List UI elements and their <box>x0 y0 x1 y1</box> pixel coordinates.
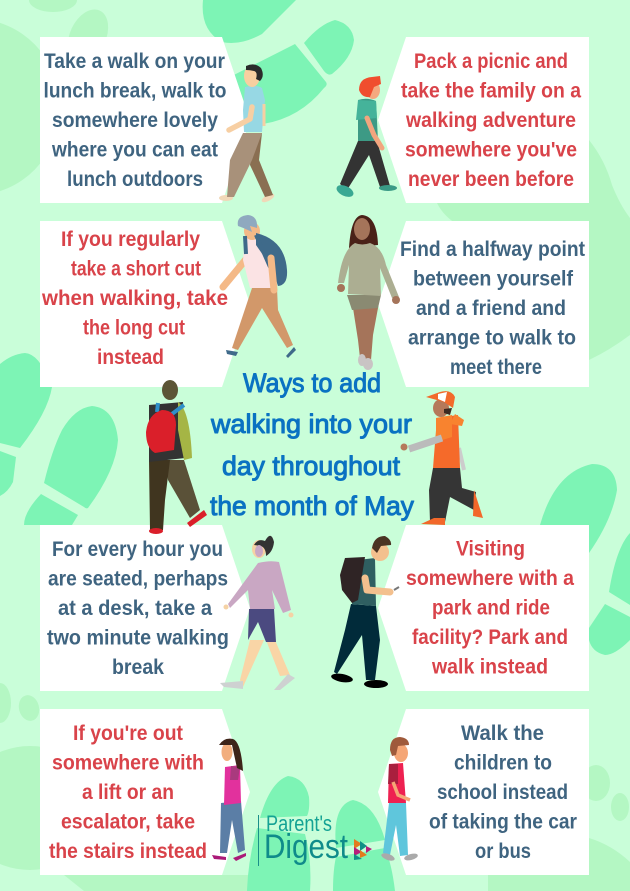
figure: boy in red t-shirt <box>380 737 419 862</box>
title: the month of May <box>210 491 414 521</box>
panel: stairs tip: somewhere with <box>52 752 204 774</box>
panel: picnic tip: take the family on a <box>401 80 581 102</box>
panel: picnic tip: Pack a picnic and <box>414 50 568 73</box>
panel: halfway point tip: between yourself <box>413 268 574 290</box>
title: day throughout <box>222 451 400 481</box>
panel: seated break tip <box>40 525 250 691</box>
panel: halfway point tip: and a friend and <box>416 297 566 320</box>
panel: school run tip: Walk the <box>461 722 544 745</box>
figure: boy in orange hoodie <box>400 391 483 525</box>
title: Ways to add <box>243 368 381 398</box>
panel: halfway point tip: meet there <box>450 356 542 379</box>
panel: halfway point tip <box>378 221 589 387</box>
panel: lunch break tip: lunch outdoors <box>67 168 203 191</box>
panel: park and ride tip: Visiting <box>456 538 525 560</box>
panel: stairs tip: If you're out <box>73 722 183 745</box>
logo: Parent's Digest: Parent's <box>266 811 332 836</box>
panel: seated break tip: are seated, perhaps <box>48 568 228 590</box>
panel: school run tip: school instead <box>437 781 568 804</box>
panel: picnic tip: never been before <box>408 168 574 191</box>
panel: park and ride tip: walk instead <box>431 656 548 678</box>
title <box>210 368 414 521</box>
figure: man in blue t-shirt walking <box>219 64 276 204</box>
panel: park and ride tip: somewhere with a <box>406 567 574 590</box>
panel: long cut tip: take a short cut <box>71 258 201 280</box>
panel: lunch break tip: lunch break, walk to <box>44 80 226 102</box>
figure: woman in green sweater <box>337 215 400 370</box>
panel: seated break tip: at a desk, take a <box>58 597 212 620</box>
panel: seated break tip: For every hour you <box>52 538 223 561</box>
panel: school run tip <box>378 709 589 875</box>
panel: long cut tip: If you regularly <box>61 228 200 251</box>
panel: park and ride tip <box>378 525 589 691</box>
panel: stairs tip <box>40 709 250 875</box>
panel: seated break tip: two minute walking <box>47 626 229 650</box>
panel: picnic tip <box>378 37 589 203</box>
figure: girl in pink top <box>212 739 246 861</box>
panel: long cut tip: instead <box>97 346 164 369</box>
panel: stairs tip: the stairs instead <box>49 840 207 863</box>
panel: school run tip: or bus <box>475 840 531 863</box>
panel: picnic tip: walking adventure <box>405 109 576 132</box>
panel: park and ride tip: facility? Park and <box>412 626 568 649</box>
figure: woman with headphones <box>220 536 295 690</box>
panel: lunch break tip: where you can eat <box>51 138 218 162</box>
panel: halfway point tip: arrange to walk to <box>408 326 576 350</box>
panel: stairs tip: a lift or an <box>82 781 174 804</box>
panel: long cut tip: when walking, take <box>41 287 228 310</box>
figure: man with phone <box>330 536 399 688</box>
panel: school run tip: children to <box>454 752 552 774</box>
figure: red-haired boy walking <box>335 76 397 199</box>
panel: seated break tip: break <box>112 656 164 679</box>
logo: Parent's Digest: Digest <box>264 828 348 866</box>
panel: park and ride tip: park and ride <box>432 596 550 620</box>
panel: halfway point tip: Find a halfway point <box>400 238 585 261</box>
logo: Parent's Digest <box>258 811 372 866</box>
figure: man with red backpack <box>146 380 207 534</box>
figure: man with blue backpack <box>223 215 296 358</box>
panel: school run tip: of taking the car <box>429 810 577 834</box>
panel: lunch break tip <box>40 37 250 203</box>
panel: long cut tip: the long cut <box>83 316 185 340</box>
title: walking into your <box>210 409 412 439</box>
panel: picnic tip: somewhere you've <box>405 138 577 162</box>
panel: stairs tip: escalator, take <box>61 810 195 834</box>
panel: lunch break tip: somewhere lovely <box>52 109 218 132</box>
panel: lunch break tip: Take a walk on your <box>44 50 225 73</box>
panel: long cut tip <box>40 221 250 387</box>
